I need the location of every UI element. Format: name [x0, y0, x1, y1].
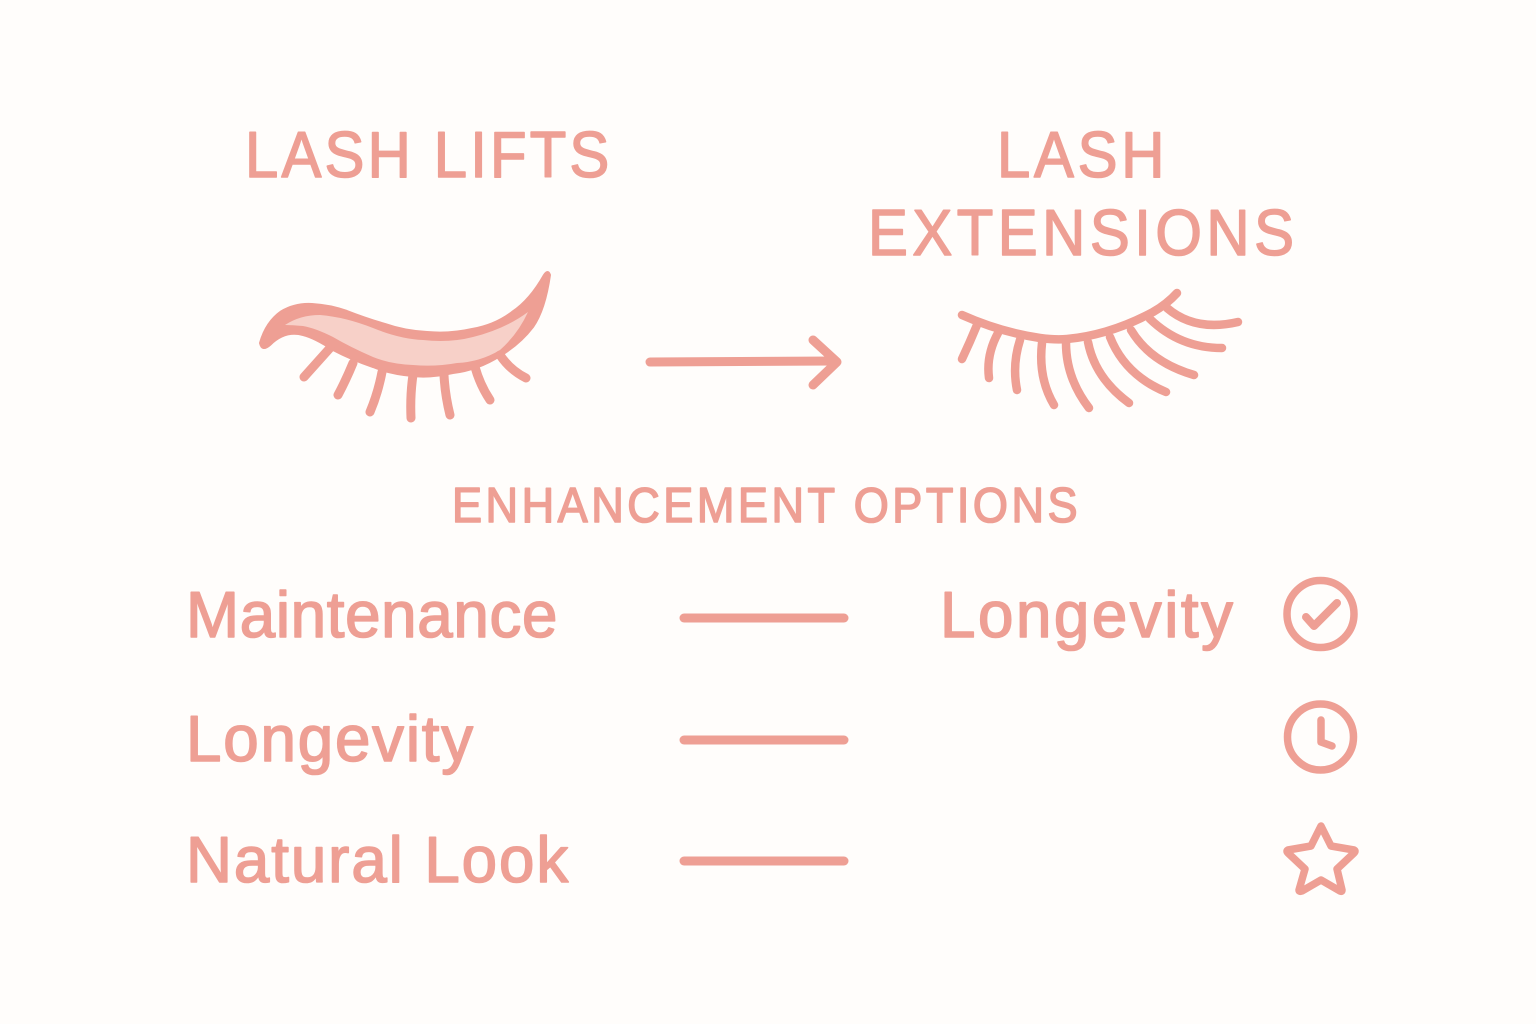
icon: lifted lash eye	[260, 272, 550, 418]
arrow	[650, 340, 837, 385]
heading: lash lifts: LASH LIFTS	[245, 119, 609, 192]
row 1 value: longevity: Longevity	[940, 578, 1234, 651]
row 3 label: natural look: Natural Look	[186, 823, 569, 896]
heading: lash extensions: EXTENSIONS	[868, 197, 1294, 270]
row 2 label: longevity: Longevity	[186, 702, 474, 775]
icon: star	[1287, 826, 1355, 891]
heading: lash extensions	[868, 119, 1294, 270]
heading: lash extensions: LASH	[997, 119, 1164, 192]
icon: lash extensions eye	[962, 293, 1238, 408]
row 2 connector line	[684, 736, 844, 744]
row 1 label: maintenance: Maintenance	[186, 578, 557, 651]
heading: enhancement options: ENHANCEMENT OPTIONS	[452, 477, 1078, 532]
icon: check circle	[1287, 580, 1354, 648]
row 1 connector line	[684, 614, 844, 622]
icon: clock	[1288, 704, 1354, 770]
row 3 connector line	[684, 856, 844, 866]
